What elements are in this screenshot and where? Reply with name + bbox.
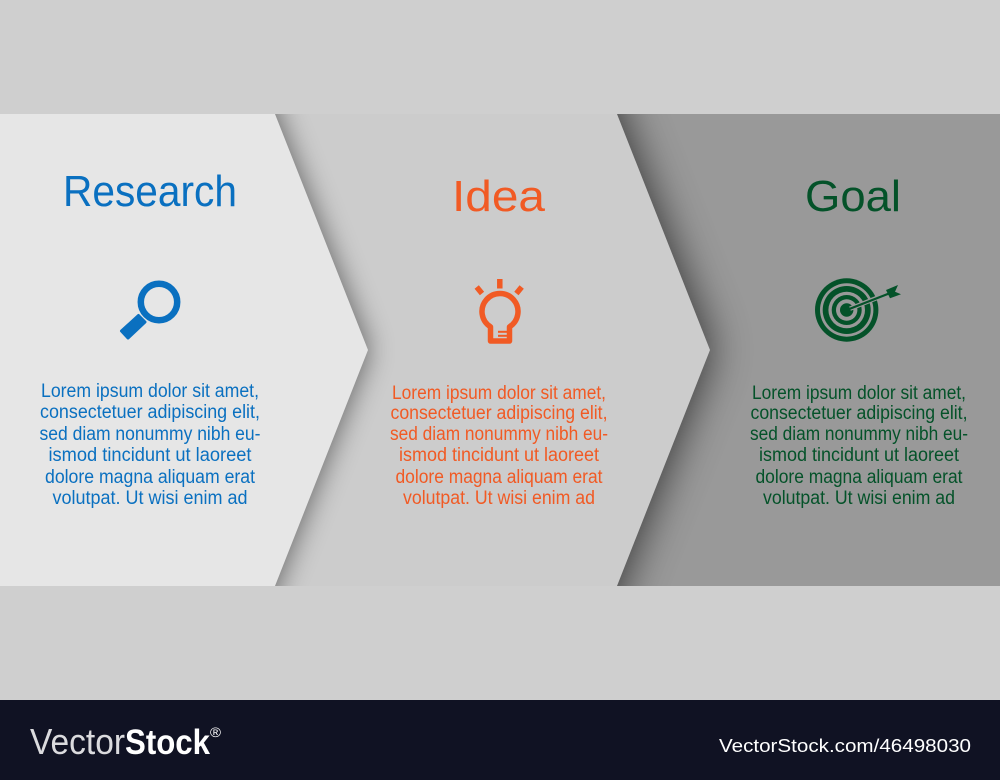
heading: Research: Research xyxy=(63,167,237,216)
text block: research: volutpat. Ut wisi enim ad xyxy=(52,488,248,509)
text block: idea: sed diam nonummy nibh eu- xyxy=(390,424,608,445)
text block: research: consectetuer adipiscing elit, xyxy=(40,402,260,423)
text block: idea: volutpat. Ut wisi enim ad xyxy=(403,488,595,509)
icon: magnifying glass xyxy=(122,284,177,338)
logo: VectorStock: Stock xyxy=(125,723,210,762)
text block: research xyxy=(40,381,260,509)
logo: VectorStock: ® xyxy=(210,724,222,740)
text block: idea: consectetuer adipiscing elit, xyxy=(390,403,608,424)
text block: research: sed diam nonummy nibh eu- xyxy=(40,424,260,445)
footer id text: VectorStock.com/46498030 xyxy=(719,736,971,756)
text block: goal xyxy=(750,383,968,509)
text block: goal: consectetuer adipiscing elit, xyxy=(750,403,968,424)
text block: goal: ismod tincidunt ut laoreet xyxy=(759,445,960,466)
text block: goal: dolore magna aliquam erat xyxy=(756,467,963,488)
text block: research: dolore magna aliquam erat xyxy=(45,467,256,488)
text block: idea: Lorem ipsum dolor sit amet, xyxy=(392,383,606,404)
text block: goal: Lorem ipsum dolor sit amet, xyxy=(752,383,966,404)
heading: Idea: Idea xyxy=(452,172,546,221)
text block: goal: sed diam nonummy nibh eu- xyxy=(750,424,968,445)
footer bar xyxy=(0,700,1000,780)
shadow: idea arrow xyxy=(617,114,734,586)
panel: idea xyxy=(275,114,710,586)
heading: Goal: Goal xyxy=(805,172,901,221)
icon: target with arrow xyxy=(815,278,901,342)
panel: research xyxy=(0,114,368,586)
text block: idea xyxy=(390,383,608,509)
logo: VectorStock xyxy=(30,721,222,762)
shadow: research arrow xyxy=(275,114,384,586)
text block: research: Lorem ipsum dolor sit amet, xyxy=(41,381,259,402)
text block: idea: dolore magna aliquam erat xyxy=(396,467,603,488)
icon: light bulb xyxy=(477,279,522,341)
logo: VectorStock: Vector xyxy=(30,721,125,762)
panel: goal xyxy=(617,114,1000,586)
text block: research: ismod tincidunt ut laoreet xyxy=(48,445,252,466)
text block: goal: volutpat. Ut wisi enim ad xyxy=(763,488,955,509)
text block: idea: ismod tincidunt ut laoreet xyxy=(399,445,600,466)
